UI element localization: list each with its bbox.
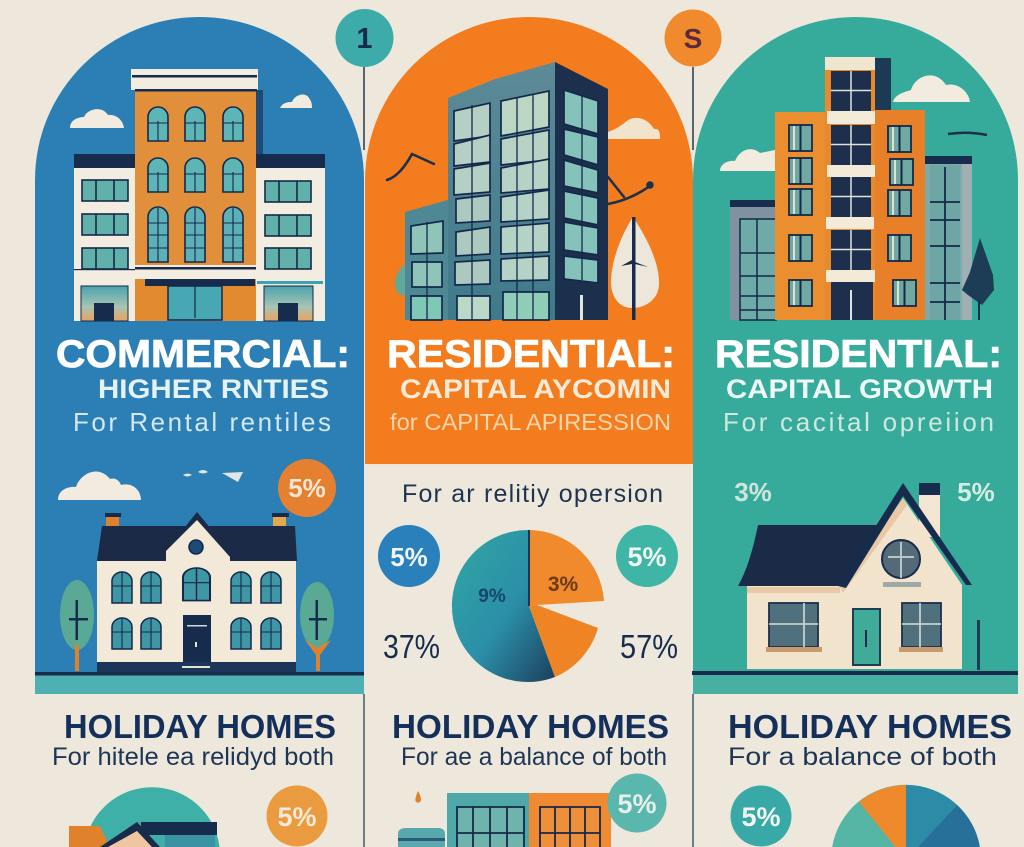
description: capital appreciation: for CAPITAL APIRESSION xyxy=(390,409,671,435)
label: 3%: 3% xyxy=(734,477,772,507)
icon: pale tree xyxy=(611,217,659,320)
description: balance: For ae a balance of both xyxy=(401,743,667,771)
badge: 5% orange lower: 5% xyxy=(277,802,317,832)
icon: detached house xyxy=(738,483,980,670)
orange arch background xyxy=(365,17,693,464)
pin: orange 5: S xyxy=(684,23,702,54)
badge: 5% teal: 5% xyxy=(627,542,667,572)
ground strip xyxy=(35,672,364,694)
badge: 5% teal lower: 5% xyxy=(617,789,657,819)
badge: 5% teal lower xyxy=(608,774,666,832)
icon: cloud and birds xyxy=(58,470,243,500)
label: 57%: 57% xyxy=(620,628,678,665)
description: balance: For a balance of both xyxy=(728,743,997,771)
badge: 5% orange lower xyxy=(266,786,328,846)
icon: cloud xyxy=(608,118,660,139)
badge: 5% teal xyxy=(616,525,678,587)
heading: holiday homes: HOLIDAY HOMES xyxy=(728,708,1012,745)
icon: glass tower xyxy=(405,62,608,320)
pin: teal number 1: 1 xyxy=(356,23,373,55)
pie label: 9%: 9% xyxy=(478,586,506,607)
ground strip xyxy=(692,671,1018,694)
pin: orange 5 xyxy=(664,10,722,66)
description: rental: For Rental rentiles xyxy=(73,407,331,437)
label: 5%: 5% xyxy=(957,477,995,507)
divider lines lower xyxy=(364,694,693,847)
description: reliability: For ar relitiy opersion xyxy=(402,480,663,508)
small teal shrub xyxy=(395,265,405,295)
badge: 5% blue xyxy=(378,525,440,587)
icon: clouds xyxy=(70,95,312,128)
heading: residential: RESIDENTIAL: xyxy=(387,333,675,376)
description: capital: For cacital opreiion xyxy=(723,407,994,437)
badge: 5% teal lower xyxy=(730,786,792,846)
heading: residential: RESIDENTIAL: xyxy=(715,333,1002,376)
subheading: capital growth: CAPITAL GROWTH xyxy=(726,374,993,404)
icon: holiday apartments xyxy=(398,791,611,847)
icon: clouds xyxy=(720,75,970,171)
icon: commercial building xyxy=(74,69,325,321)
panel: residential income xyxy=(365,17,693,847)
heading: holiday homes: HOLIDAY HOMES xyxy=(392,708,669,745)
label: 37%: 37% xyxy=(383,628,440,665)
pie label: 3%: 3% xyxy=(548,573,578,596)
heading: commercial: COMMERCIAL: xyxy=(56,333,350,376)
pie chart lower xyxy=(832,785,980,847)
pin: teal number 1 xyxy=(336,9,394,67)
heading: holiday homes: HOLIDAY HOMES xyxy=(64,708,336,745)
icon: holiday house in teal circle xyxy=(69,787,220,847)
teal arch background xyxy=(693,17,1018,694)
pie chart xyxy=(452,530,604,682)
subheading: capital income: CAPITAL AYCOMIN xyxy=(400,374,671,404)
icon: bird line xyxy=(948,133,987,135)
icon: dark tree xyxy=(962,238,994,320)
icon: apartment block xyxy=(730,57,972,320)
badge: 5% orange xyxy=(278,459,336,517)
badge: 5% orange: 5% xyxy=(288,473,326,503)
panel: residential growth xyxy=(692,17,1018,847)
badge: 5% blue: 5% xyxy=(390,542,428,572)
subheading: higher rentals: HIGHER RNTIES xyxy=(98,374,329,404)
icon: townhouse xyxy=(97,512,297,673)
blue arch background xyxy=(35,17,364,694)
icon: birds xyxy=(387,154,652,204)
vertical divider lines xyxy=(364,67,693,150)
description: holiday: For hitele ea relidyd both xyxy=(52,743,334,771)
panel: commercial xyxy=(35,17,364,847)
badge: 5% teal lower: 5% xyxy=(741,802,781,832)
icon: trees xyxy=(60,580,334,671)
